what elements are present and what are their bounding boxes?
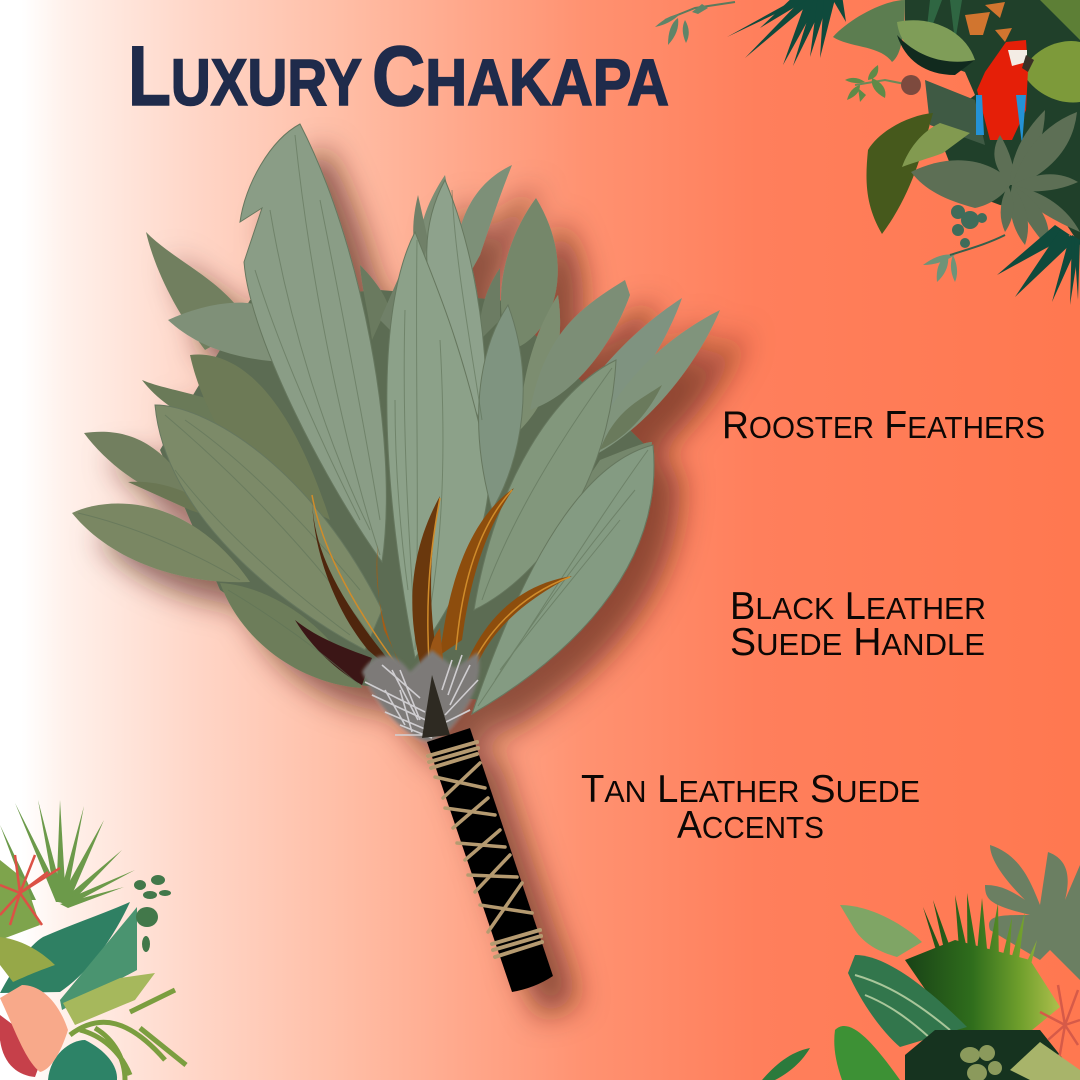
green sprig	[134, 875, 171, 952]
lime monstera	[1022, 41, 1080, 103]
label: tan leather suede accents	[581, 768, 920, 847]
red spiky plant	[1040, 985, 1080, 1065]
light leaf	[840, 905, 922, 957]
parrot	[976, 40, 1034, 145]
striped leaf	[848, 955, 967, 1047]
label: tan leather suede accents: ACCENTS	[677, 804, 824, 847]
title: CHAKAPA	[372, 29, 669, 123]
top right foliage with parrot	[655, 0, 1080, 305]
bottom right foliage	[762, 845, 1080, 1080]
small sprig top	[655, 2, 735, 45]
upper right palms and olive	[925, 0, 1080, 45]
seed pods	[960, 1045, 1002, 1080]
chakapa fan bundle	[72, 124, 720, 992]
red spiky plant	[0, 855, 60, 925]
grey feather fluff	[362, 650, 479, 742]
teal broad leaf	[0, 902, 130, 993]
label: black leather suede handle: SUEDE HANDLE	[730, 621, 985, 664]
leaf veins	[78, 135, 648, 706]
dark base	[905, 1030, 1080, 1080]
label: rooster feathers: ROOSTER FEATHERS	[722, 404, 1045, 447]
tip blade	[762, 1048, 810, 1080]
peach flower	[0, 985, 68, 1077]
yellow fan	[0, 937, 55, 982]
arching palm	[70, 990, 186, 1080]
fern	[833, 0, 905, 62]
label: black leather suede handle	[730, 585, 986, 664]
back leaves	[72, 165, 720, 700]
orange blossoms	[965, 2, 1012, 42]
dark palm blades	[727, 0, 846, 66]
lower palm blades	[997, 225, 1080, 305]
title: LUXURY	[128, 29, 362, 123]
title	[128, 29, 669, 123]
palm fan	[0, 800, 135, 908]
dark backing mass	[905, 0, 1080, 245]
broad light green leaf	[897, 20, 975, 70]
lime leaves	[63, 973, 155, 1025]
label: black leather suede handle: BLACK LEATHER	[730, 585, 986, 628]
banana leaf	[834, 1026, 900, 1080]
suede handle	[427, 728, 553, 992]
left green filler	[0, 860, 40, 940]
olive leaf	[866, 113, 933, 234]
rooster feathers	[312, 488, 572, 715]
grey green palm	[925, 80, 985, 145]
grey monstera	[985, 845, 1080, 980]
pale palm	[1010, 1042, 1080, 1080]
front leaves	[155, 124, 654, 714]
light leaf	[902, 123, 970, 167]
bottom left foliage	[0, 800, 186, 1080]
green palm fan	[905, 893, 1060, 1040]
grey monstera	[911, 110, 1080, 248]
berry sprig	[923, 205, 1005, 282]
berry flower sprig left	[845, 65, 921, 102]
label: tan leather suede accents: TAN LEATHER SUEDE	[581, 768, 920, 811]
teal fan	[48, 1040, 117, 1080]
tan leather suede lacing	[428, 742, 542, 957]
dark feather base	[295, 620, 372, 685]
